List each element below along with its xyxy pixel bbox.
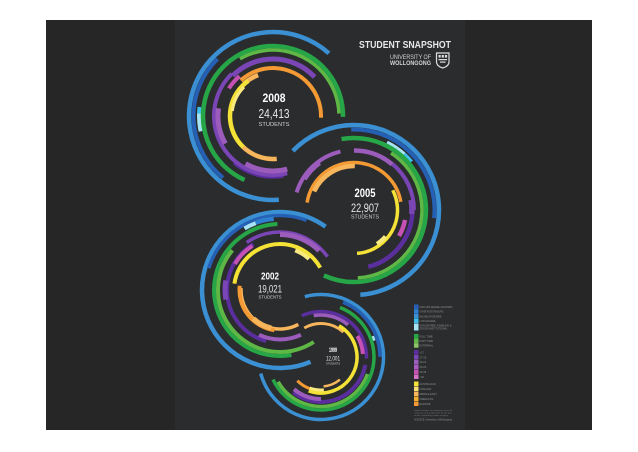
legend: degree types: LOW DEGREE (420, 319, 436, 323)
poster panel (175, 20, 465, 430)
rings: 2005 origin (295, 151, 413, 269)
slide background (46, 20, 592, 430)
legend: study mode: FULL TIME (420, 334, 433, 338)
legend: degree types: BACHELOR DEGREE (420, 314, 442, 318)
rings: 2002 age groups (199, 209, 361, 371)
label: 2002: 2002 (261, 272, 279, 282)
chart: 2008 rings (161, 4, 385, 228)
university name: UNIVERSITY OF (390, 54, 431, 61)
legend: study mode: EXTERNAL (420, 344, 434, 348)
rings: 1999 age groups (261, 297, 381, 417)
rings: 1999 degree types (244, 280, 398, 434)
legend: age groups: 30-39 (420, 370, 427, 374)
rings: 2002 study mode (194, 204, 366, 376)
legend: age groups: >40 (420, 375, 424, 379)
chart: 2005 rings (234, 90, 474, 330)
rings: 2002 degree types (178, 188, 382, 392)
label: 2005: 22,907 (351, 201, 379, 215)
label: 1999: 12,001 (326, 356, 340, 362)
rings: 2008 origin (205, 48, 341, 184)
label: 2008: 24,413 (258, 107, 290, 121)
label: 1999: STUDENTS (326, 362, 340, 366)
legend: footnote (414, 409, 453, 422)
legend: age groups: 17-19 (420, 355, 427, 359)
rings: 2008 degree types (161, 4, 385, 228)
rings: 2002 origin (225, 235, 335, 345)
rings: 2008 study mode (181, 24, 365, 208)
chart: 1999 rings (244, 280, 398, 434)
legend: origin: MIDDLE EAST (420, 392, 437, 396)
label: 2005: STUDENTS (351, 214, 379, 220)
university name: WOLLONGONG (390, 60, 431, 67)
legend: study mode: PART TIME (420, 339, 433, 343)
label: 1999: 1999 (329, 347, 337, 354)
legend: age groups: 20-24 (420, 360, 427, 364)
label: 2005 (351, 188, 379, 220)
label: 2008 (258, 91, 290, 128)
legend (414, 304, 453, 422)
legend: origin: OCEANIA (420, 387, 431, 391)
rings: 1999 study mode (253, 289, 389, 425)
legend: footnote: Student numbers are enrolments across all (414, 409, 452, 412)
legend: origin: AUSTRALIAN (420, 382, 436, 386)
legend: degree types: OTHER POSTGRADUATE (420, 310, 444, 314)
label: 2005: 2005 (354, 188, 376, 200)
legend: age groups: <17 (420, 350, 424, 354)
legend: study mode (414, 334, 434, 348)
legend: origin: EUROPE (420, 402, 431, 406)
legend: degree types: HONOURS DEGREE & MASTERS (420, 305, 453, 309)
chart: 2002 rings (178, 188, 382, 392)
rings: 2005 study mode (260, 116, 448, 304)
title: STUDENT SNAPSHOT (359, 40, 451, 51)
legend: footnote: campuses and study modes for the year (414, 412, 452, 414)
legend: degree types: CROSS-INSTITUTIONAL (420, 327, 448, 331)
label: 2008: 2008 (262, 91, 286, 105)
rings: 2005 degree types (234, 90, 474, 330)
label: 2002: 19,021 (258, 284, 282, 296)
label: 2002: STUDENTS (258, 294, 282, 300)
university name (390, 54, 431, 67)
rings: 1999 origin (272, 308, 370, 406)
legend: degree types (414, 304, 453, 331)
legend: degree types: NON-DEGREE, ENABLING & (420, 324, 452, 328)
legend: origin (414, 382, 437, 406)
legend: age groups (414, 350, 427, 379)
icon: university shield (436, 53, 449, 68)
label: 2008: STUDENTS (258, 122, 290, 128)
legend: footnote: shown, grouped by student category (414, 414, 449, 417)
legend: footnote: SOURCE University of Wollongong (414, 418, 453, 422)
legend: age groups: 25-29 (420, 365, 427, 369)
rings: 2008 age groups (192, 35, 354, 197)
label: 2002 (258, 272, 282, 300)
rings: 2005 age groups (269, 125, 439, 295)
legend: origin: AMERICAS (420, 397, 433, 401)
label: 1999 (326, 347, 340, 366)
